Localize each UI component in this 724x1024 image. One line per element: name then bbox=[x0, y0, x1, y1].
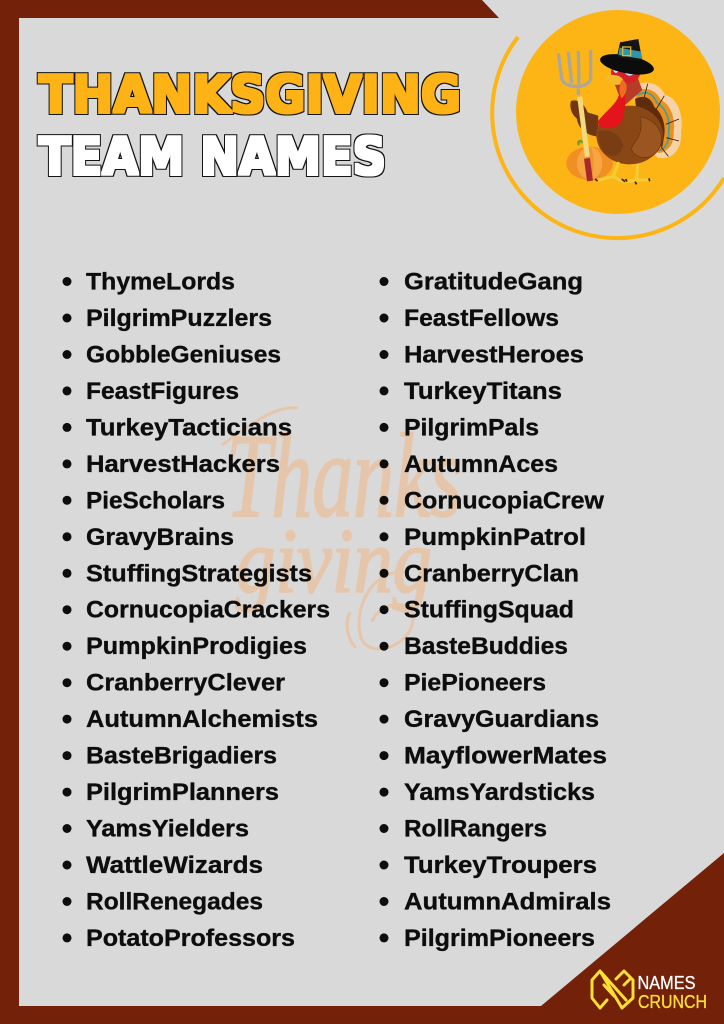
team names: right column: MayflowerMates bbox=[404, 743, 607, 770]
wing bbox=[632, 117, 661, 158]
decorative ring arc bbox=[492, 37, 724, 238]
team names: right column: RollRangers bbox=[404, 816, 547, 842]
icon: pilgrim turkey with pitchfork bbox=[558, 39, 682, 184]
team names: right column bbox=[404, 268, 611, 952]
team names: right column: TurkeyTroupers bbox=[404, 852, 597, 879]
team names: right column: YamsYardsticks bbox=[404, 779, 595, 806]
watermark: Thanksgiving script: Thanks bbox=[226, 409, 462, 542]
team names: left column: PilgrimPuzzlers bbox=[86, 305, 272, 332]
team names: left column: PieScholars bbox=[86, 487, 225, 514]
team names: left column: CornucopiaCrackers bbox=[86, 597, 330, 624]
team names: left column: RollRenegades bbox=[86, 888, 263, 916]
red wattle bbox=[597, 83, 625, 128]
eyes bbox=[613, 64, 635, 76]
watermark: Thanksgiving script bbox=[222, 408, 462, 649]
team names: right column: FeastFellows bbox=[404, 305, 559, 332]
team names: right column: StuffingSquad bbox=[404, 597, 574, 624]
logo wordmark: NAMES bbox=[638, 972, 696, 993]
title line: THANKSGIVING: THANKSGIVING bbox=[39, 66, 461, 126]
pumpkin bbox=[566, 141, 613, 180]
team names: left column: PumpkinProdigies bbox=[86, 633, 307, 660]
team names: left column: BasteBrigadiers bbox=[86, 743, 277, 770]
arm and hand bbox=[570, 100, 598, 137]
team names: right column: CornucopiaCrew bbox=[404, 487, 605, 514]
team names: right column: PiePioneers bbox=[404, 670, 546, 697]
team names: left column: CranberryClever bbox=[86, 670, 285, 697]
team names: right column: BasteBuddies bbox=[404, 633, 568, 660]
logo: Names Crunch: CRUNCH bbox=[638, 991, 707, 1012]
logo icon bbox=[592, 971, 633, 1008]
neck bbox=[615, 75, 642, 107]
beak bbox=[605, 75, 623, 85]
team names: left column: GravyBrains bbox=[86, 524, 234, 551]
team names: left column: AutumnAlchemists bbox=[86, 706, 318, 733]
yellow circle badge bbox=[516, 10, 720, 214]
team names: right column: PilgrimPals bbox=[404, 414, 539, 441]
team names: left column bbox=[86, 268, 330, 952]
team names: right column: GravyGuardians bbox=[404, 706, 599, 733]
team names: right column: AutumnAdmirals bbox=[404, 888, 611, 916]
head bbox=[611, 61, 640, 84]
team names: right column: GratitudeGang bbox=[404, 268, 583, 296]
team names: left column: HarvestHackers bbox=[86, 451, 280, 478]
tail feathers bbox=[633, 83, 682, 158]
turkey body bbox=[596, 106, 663, 164]
snood bbox=[619, 80, 627, 98]
legs and feet bbox=[598, 163, 650, 182]
claws bbox=[595, 178, 650, 184]
team names: left column: StuffingStrategists bbox=[86, 560, 312, 587]
logo: Names Crunch bbox=[592, 971, 707, 1012]
team names: right column: PumpkinPatrol bbox=[404, 524, 586, 551]
watermark: Thanksgiving script: giving bbox=[236, 510, 432, 612]
team names: left column: YamsYielders bbox=[86, 816, 249, 842]
team names: right column: PilgrimPioneers bbox=[404, 925, 595, 952]
pitchfork bbox=[558, 50, 591, 181]
team names: left column: PilgrimPlanners bbox=[86, 779, 279, 806]
team names: left column: TurkeyTacticians bbox=[86, 414, 292, 441]
team names: right column: TurkeyTitans bbox=[404, 378, 562, 405]
pilgrim hat bbox=[598, 39, 656, 78]
team names: left column: WattleWizards bbox=[86, 852, 263, 879]
team names: right column: AutumnAces bbox=[404, 451, 558, 478]
title bbox=[39, 66, 461, 188]
team names: right column: CranberryClan bbox=[404, 560, 579, 587]
team names: left column: ThymeLords bbox=[86, 268, 235, 296]
list bullets bbox=[62, 277, 388, 942]
team names: right column: HarvestHeroes bbox=[404, 342, 584, 368]
team names: left column: FeastFigures bbox=[86, 378, 239, 405]
title line: TEAM NAMES: TEAM NAMES bbox=[39, 128, 386, 188]
team names: left column: GobbleGeniuses bbox=[86, 342, 281, 368]
belly shading bbox=[598, 131, 623, 156]
team names: left column: PotatoProfessors bbox=[86, 925, 295, 952]
